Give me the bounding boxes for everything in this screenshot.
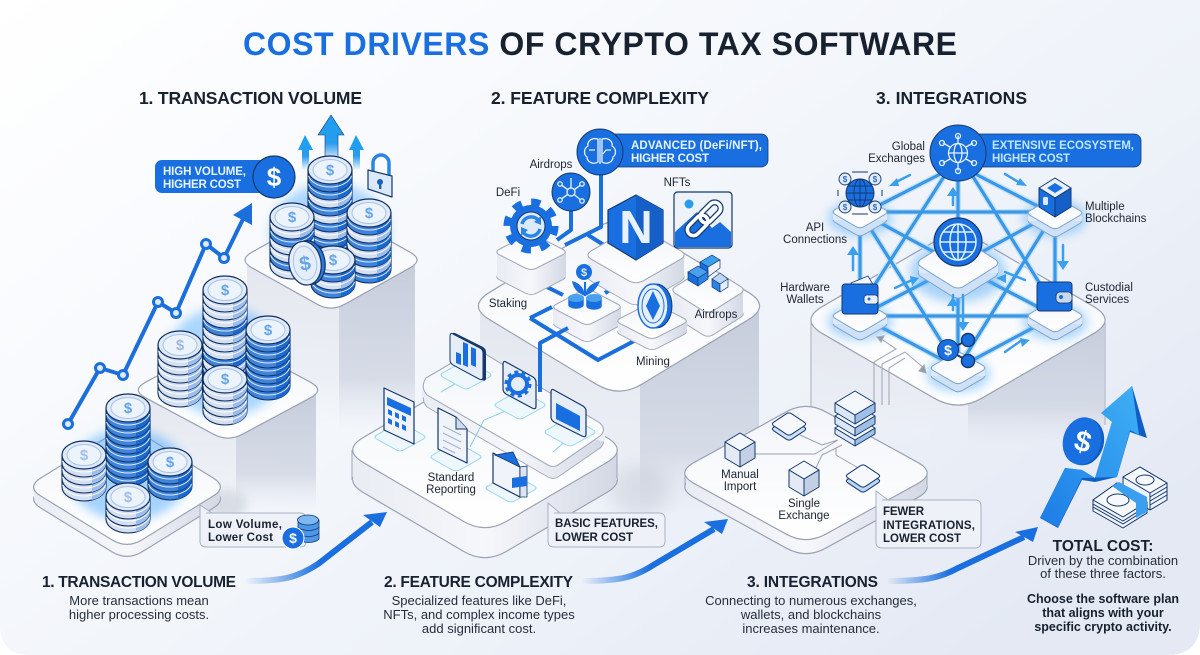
circuit lines (530, 175, 638, 360)
caption: total cost: Driven by the combination (1028, 553, 1178, 568)
icon: NFT image tile (674, 192, 732, 248)
network lines underlay (860, 165, 1055, 368)
coin stacks: mid volume (158, 276, 290, 425)
standing coin: $ (298, 252, 313, 276)
block: DeFi (497, 234, 566, 295)
front stack (311, 246, 355, 298)
labels: feature types: Airdrops (695, 309, 738, 321)
caption: total cost: of these three factors. (1040, 566, 1166, 581)
icon: hardware wallet (842, 276, 878, 314)
node: bottom (926, 352, 990, 392)
icon: N hexagon (608, 195, 663, 260)
caption: integrations: Connecting to numerous exchanges, (705, 593, 917, 608)
labels: integration types: Exchanges (868, 153, 925, 165)
callout: basic features lower cost (548, 503, 665, 547)
caption: feature complexity: Specialized features like DeFi, (392, 593, 566, 608)
heading: feature complexity: 2. FEATURE COMPLEXITY (491, 88, 709, 108)
tall stack (203, 276, 247, 392)
labels: low integrations: Manual (721, 469, 759, 481)
heading: transaction volume: 1. TRANSACTION VOLUME (139, 88, 362, 108)
icon: globe with coins: $ (873, 175, 878, 184)
icon: N hexagon: N (619, 201, 653, 253)
labels: integration types: Wallets (786, 294, 824, 306)
labels: feature types (426, 159, 738, 496)
icon: big rising arrow (1040, 386, 1147, 528)
icon: central globe (934, 218, 982, 266)
labels: low integrations (721, 469, 830, 522)
caption: transaction volume: More transactions mean (69, 593, 209, 608)
right stack: $ (365, 205, 374, 222)
right stack (347, 199, 391, 283)
background corners (0, 622, 1200, 655)
pill: advanced higher cost: HIGHER COST (631, 153, 709, 165)
labels: integration types: Custodial (1085, 282, 1133, 294)
title: COST DRIVERS OF CRYPTO TAX SOFTWARE (243, 26, 957, 62)
badge: high volume higher cost (155, 156, 295, 198)
icon: calculator (375, 388, 425, 451)
left stack (270, 203, 314, 279)
caption: total cost: that aligns with your (1042, 606, 1164, 620)
left stack (158, 331, 202, 407)
back stack (1123, 467, 1167, 510)
badge: high volume higher cost: HIGH VOLUME, (163, 166, 246, 178)
icon: small tile top (772, 413, 806, 440)
left stack: $ (176, 337, 185, 354)
platform: low volume (34, 430, 247, 556)
caption: feature complexity: 2. FEATURE COMPLEXITY (384, 574, 574, 591)
tall stack: $ (326, 162, 335, 179)
caption: feature complexity: NFTs, and complex income types (383, 607, 575, 622)
labels: feature types: Standard (428, 472, 474, 484)
callout: fewer integrations: LOWER COST (883, 533, 961, 545)
badge: high volume higher cost: $ (267, 162, 282, 192)
caption: total cost (1027, 538, 1179, 634)
caption: integrations (705, 574, 917, 636)
left stack: $ (288, 209, 297, 226)
arrow: integrations to total (887, 527, 1038, 581)
block: NFT (588, 227, 684, 305)
coin stacks: low volume (62, 394, 192, 533)
block: staking (553, 289, 621, 342)
labels: feature types: DeFi (496, 187, 520, 199)
labels: integration types: Hardware (780, 282, 830, 294)
tall stack: $ (221, 282, 230, 299)
icon: small tile bottom (846, 465, 880, 492)
callout: fewer integrations: INTEGRATIONS, (883, 520, 975, 532)
tile: settings gear (495, 361, 545, 419)
badge: high volume higher cost: HIGHER COST (163, 179, 241, 191)
pill: advanced higher cost: ADVANCED (DeFi/NFT), (631, 140, 762, 152)
front stack (203, 365, 247, 425)
icon: globe with coins: $ (843, 175, 848, 184)
up arrows (298, 115, 364, 170)
caption: total cost: specific crypto activity. (1034, 620, 1172, 634)
labels: feature types: Reporting (426, 484, 476, 496)
icon: airdrop cubes (688, 255, 728, 292)
icon: globe with coins (838, 172, 882, 214)
tall stack (308, 156, 352, 264)
caption: integrations: wallets, and blockchains (740, 607, 882, 622)
callout: low volume lower cost (200, 505, 319, 549)
icon: connected coins: $ (944, 342, 952, 358)
icon: staking plant: $ (581, 267, 587, 279)
large platform: basic features (352, 372, 670, 558)
block: airdrops (673, 268, 743, 336)
icon: mini coins: $ (289, 530, 297, 546)
icon: globe with coins: $ (873, 203, 878, 212)
tile: bar chart (441, 333, 491, 389)
callout: basic features lower cost: LOWER COST (555, 532, 633, 544)
labels: feature types: Staking (489, 298, 527, 310)
pill: advanced higher cost (577, 129, 768, 190)
labels: integration types: Blockchains (1085, 213, 1147, 225)
chain link (685, 200, 723, 238)
icon: ethereum coin (638, 284, 672, 328)
front stack: $ (221, 371, 230, 388)
podium: extensive ecosystem (811, 235, 1105, 445)
node: bottom left (828, 300, 892, 340)
panel: integrations illustration (685, 125, 1147, 554)
caption: feature complexity (383, 574, 575, 636)
labels: integration types (780, 141, 1147, 306)
caption: transaction volume: 1. TRANSACTION VOLUME (42, 574, 236, 591)
panel: feature complexity illustration (352, 129, 768, 558)
tile: folder (545, 389, 595, 446)
pill: extensive ecosystem (930, 125, 1141, 181)
tall stack: $ (124, 400, 133, 417)
icon: connected coins (938, 334, 974, 368)
flow arrows (847, 174, 1069, 352)
podium: advanced features (478, 221, 760, 515)
podium: mid volume (138, 342, 318, 510)
tier: reporting tools (422, 350, 605, 478)
icon: dollar coin (1057, 413, 1109, 470)
front stack: $ (124, 489, 133, 506)
standing coin (285, 238, 329, 288)
callout: fewer integrations: FEWER (883, 506, 925, 518)
front stack (1093, 482, 1147, 528)
connector line (540, 328, 568, 392)
panel: transaction volume illustration (34, 115, 417, 556)
icon: dollar coin: $ (1071, 425, 1095, 460)
caption: transaction volume (42, 574, 236, 622)
labels: low integrations: Exchange (778, 510, 830, 522)
caption: feature complexity: add significant cost. (422, 621, 536, 636)
left stack: $ (80, 447, 89, 464)
icon: gear (507, 202, 555, 250)
pill: extensive ecosystem: EXTENSIVE ECOSYSTEM, (992, 140, 1134, 152)
platform: fewer integrations (685, 406, 927, 554)
node: hub (910, 238, 1006, 302)
line chart: rising volume (64, 203, 252, 428)
callout: fewer integrations (876, 491, 981, 548)
labels: feature types: NFTs (664, 177, 691, 189)
icon: document (431, 408, 481, 471)
icon: single exchange cube (789, 461, 819, 496)
labels: integration types: Multiple (1085, 201, 1125, 213)
icon: server stack (835, 391, 875, 446)
caption: integrations: 3. INTEGRATIONS (747, 574, 878, 591)
labels: low integrations: Single (788, 498, 820, 510)
network lines (860, 165, 1055, 368)
podium: high volume (245, 212, 417, 430)
labels: integration types: Connections (783, 234, 847, 246)
icon: wallet (486, 452, 536, 502)
icon: manual import cube (725, 433, 755, 467)
arrow: volume to features (245, 512, 387, 581)
caption: integrations: increases maintenance. (742, 621, 880, 636)
arrow: features to integrations (582, 519, 728, 581)
labels: feature types: Airdrops (530, 159, 573, 171)
callout: low volume lower cost: Lower Cost (208, 532, 273, 544)
icon: padlock (368, 155, 392, 197)
labels: integration types: API (806, 222, 824, 234)
labels: low integrations: Import (724, 481, 757, 493)
right stack: $ (264, 322, 273, 339)
icon: airdrop network (552, 173, 590, 211)
panel: total cost illustration (1040, 386, 1167, 528)
front stack: $ (329, 252, 338, 269)
icon: staking plant (568, 264, 602, 310)
heading: integrations: 3. INTEGRATIONS (876, 88, 1027, 108)
callout: basic features lower cost: BASIC FEATURES, (555, 518, 658, 530)
labels: feature types: Mining (636, 356, 670, 368)
icon: cash bundle (1093, 467, 1167, 528)
node: top left (828, 196, 892, 236)
icon: blockchain cube (1039, 178, 1071, 217)
right stack: $ (166, 454, 175, 471)
node: bottom right (1023, 300, 1087, 340)
labels: integration types: Global (892, 141, 925, 153)
caption: transaction volume: higher processing costs. (69, 607, 209, 622)
callout: low volume lower cost: Low Volume, (208, 519, 282, 531)
icon: custodial wallet (1037, 282, 1072, 311)
pill: extensive ecosystem: HIGHER COST (992, 153, 1070, 165)
node: top right (1023, 197, 1087, 237)
caption: total cost: TOTAL COST: (1053, 538, 1153, 555)
block: mining (618, 303, 687, 350)
labels: integration types: Services (1085, 294, 1129, 306)
caption: total cost: Choose the software plan (1027, 592, 1179, 606)
coin stacks: high volume (270, 156, 391, 298)
icon: globe with coins: $ (843, 203, 848, 212)
pipes: upgrade paths (874, 336, 926, 405)
right stack (246, 316, 290, 400)
